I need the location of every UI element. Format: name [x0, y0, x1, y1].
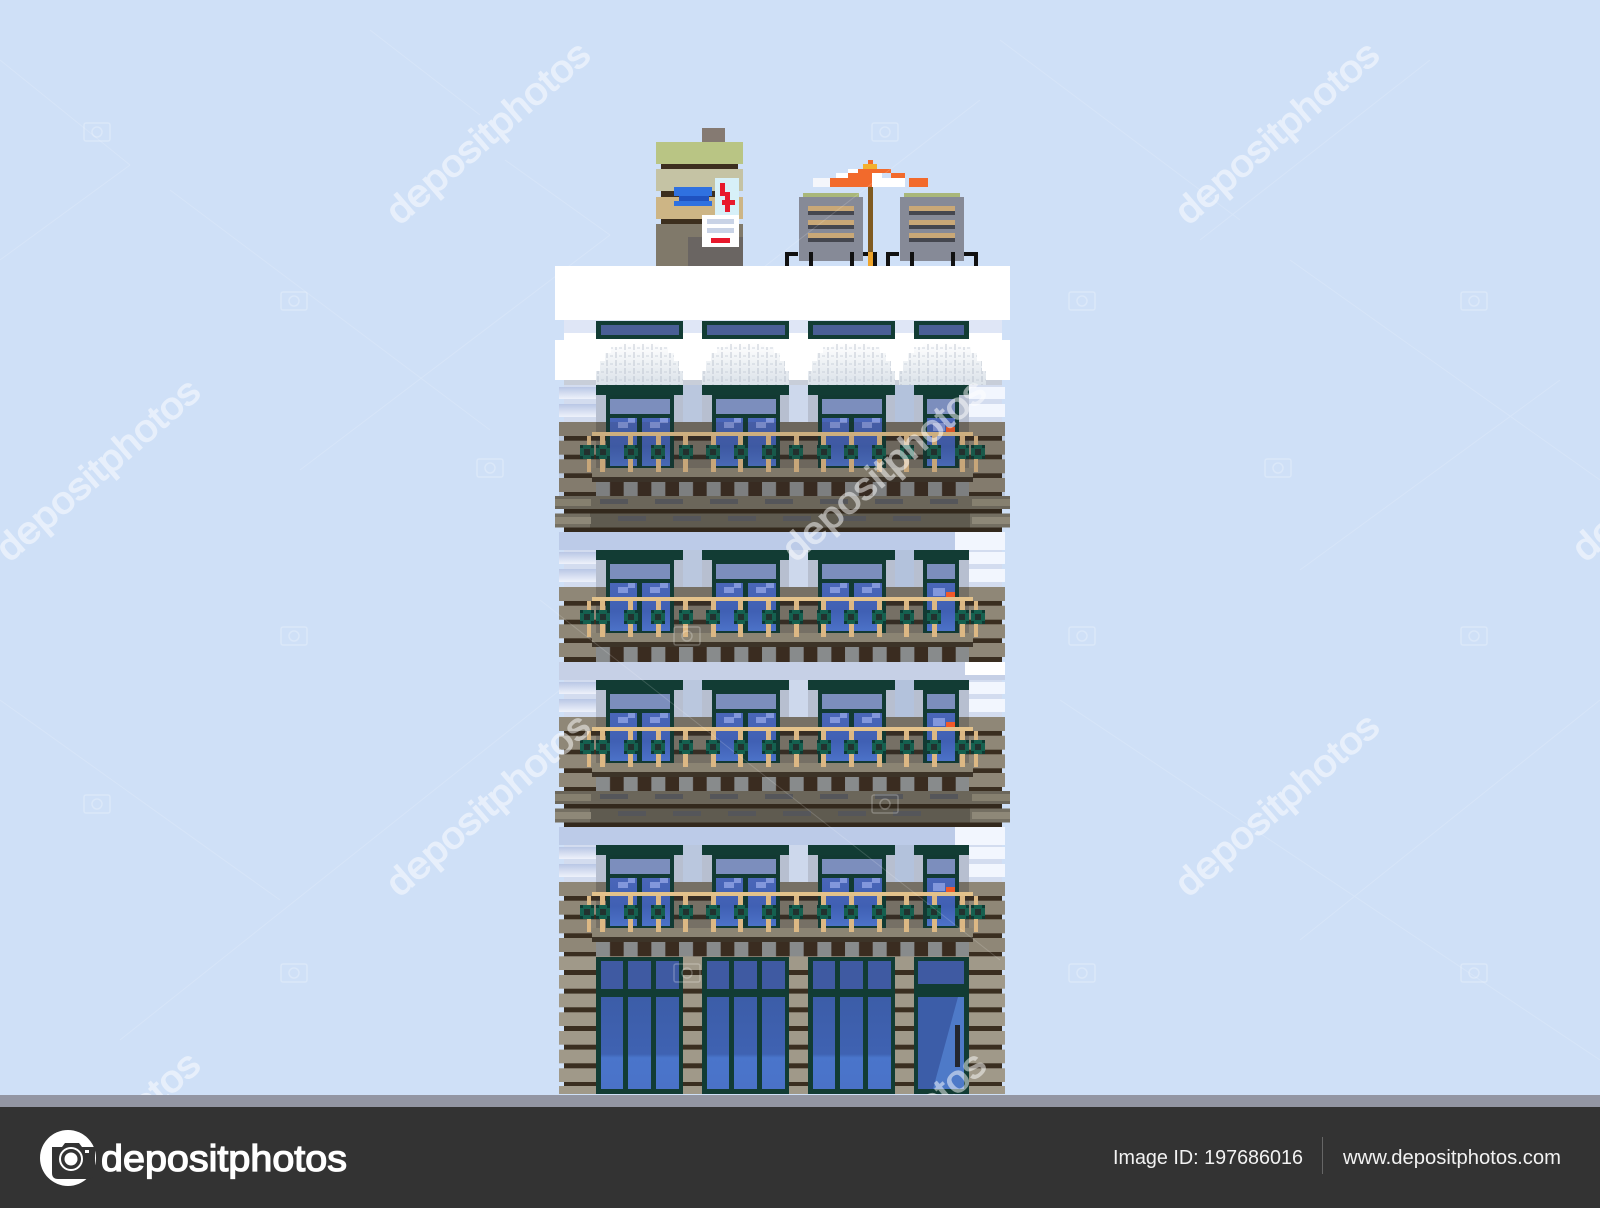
shopfront window 3: [808, 957, 895, 1094]
floor 4: [559, 845, 1005, 957]
umbrella: [813, 160, 928, 266]
decorative cornice 1: [555, 496, 1010, 532]
door: [914, 957, 969, 1094]
floor 3: [559, 680, 1005, 792]
footer bar: [0, 1107, 1600, 1208]
footer logo icon: [40, 1130, 96, 1186]
camera marks: [84, 123, 1487, 982]
floor 2: [559, 550, 1005, 662]
rooftop tower: [656, 128, 743, 266]
ground floor stone: [559, 956, 1005, 1094]
awning domes: [596, 343, 986, 385]
shopfront window 2: [702, 957, 789, 1094]
decorative cornice 2: [555, 791, 1010, 827]
footer logo wordmark: depositphotos: [101, 1138, 347, 1179]
shopfront window 1: [596, 957, 683, 1094]
shadow band 2: [559, 827, 1005, 845]
attic windows: [596, 321, 969, 339]
icon: red cross sign: [715, 178, 739, 219]
website: www.depositphotos.com: [1342, 1147, 1561, 1169]
icon: blue sign: [674, 187, 712, 206]
ground strip: [0, 1095, 1600, 1107]
air conditioning unit left: [785, 193, 877, 266]
floor 1: [559, 385, 1005, 497]
white cornice: [555, 340, 1010, 380]
attic wall: [564, 320, 1002, 340]
tower bands: [656, 142, 743, 266]
roof parapet: [555, 266, 1010, 320]
image id: Image ID: 197686016: [1113, 1147, 1303, 1169]
shadow band: [559, 532, 1005, 550]
building: [555, 266, 1010, 1094]
icon: white notice: [702, 215, 739, 247]
white strip: [559, 662, 1005, 680]
chimney: [702, 128, 725, 142]
floor 1 shade: [559, 422, 1005, 496]
air conditioning unit right: [886, 193, 978, 266]
